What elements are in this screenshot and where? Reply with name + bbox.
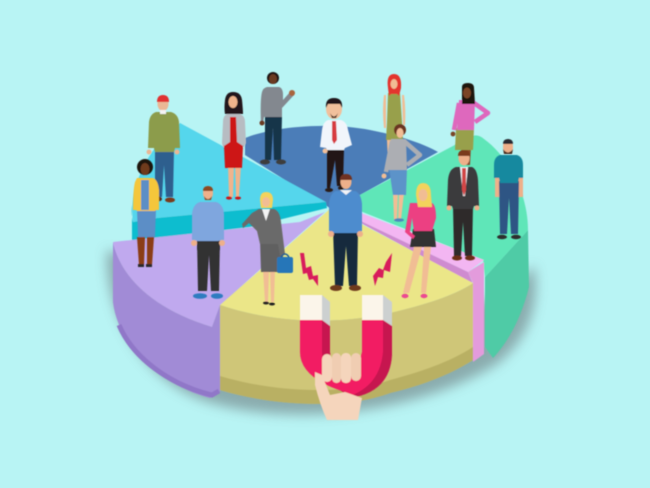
person: man in grey sweater waving [260,72,295,164]
person: man in olive sweater [146,95,180,202]
person: blonde woman in pink top [402,183,436,298]
person: man in dark suit [446,150,480,260]
slice: blue [245,126,438,208]
people [133,72,523,306]
magnet tip: right [362,295,392,326]
icon: hand [315,353,362,420]
person: man in blue sweater [328,174,363,291]
lightning bolts [300,253,392,286]
person: woman in grey top and blue skirt [382,124,420,222]
pie chart [113,123,529,404]
person: man in teal t-shirt [494,139,523,239]
icon: right lightning bolt [373,253,392,286]
person: red-haired woman in olive dress [383,74,405,165]
person: man with white shirt and red tie [320,98,352,192]
magnet shadow side [315,320,392,398]
icon: left lightning bolt [300,253,318,286]
slice: cyan [132,123,327,241]
icon: horseshoe magnet held in hand [300,295,392,420]
person: woman in yellow cardigan [133,159,159,267]
person: woman in red dress [222,92,246,200]
slice: green [345,135,529,358]
magnet body [300,320,383,396]
person: woman in pink top [451,83,488,165]
magnet tip: left [300,295,330,326]
person: man in periwinkle sweater [191,186,225,299]
slice: yellow [220,208,473,404]
pie shadow [107,250,536,415]
slice: purple [113,212,325,398]
slice: pink [335,205,484,362]
person: businesswoman with blue bag [242,192,293,306]
